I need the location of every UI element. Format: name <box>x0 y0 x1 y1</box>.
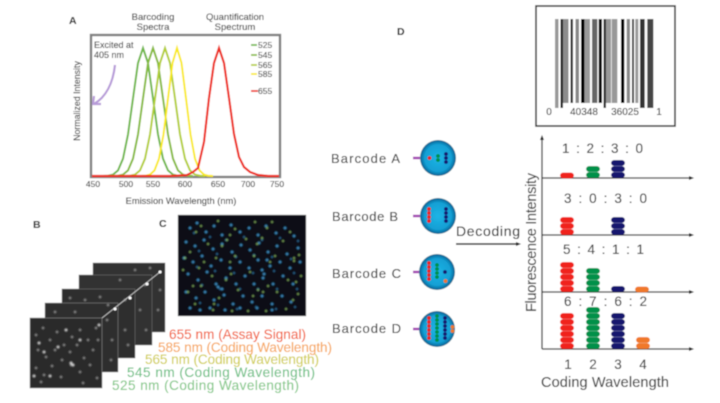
baseline arrowheads <box>689 176 694 351</box>
ratio row A: 1 : 2 : 3 : 0 <box>562 141 643 156</box>
coding wavelength numbers: 3 <box>614 357 622 372</box>
x axis ticks: 700 <box>241 179 255 189</box>
barcode digits: 40348 <box>570 107 598 118</box>
curve 585 <box>141 48 213 176</box>
barcode digits: 0 <box>546 107 552 118</box>
name: Barcode C <box>332 266 401 281</box>
name: Barcode D <box>332 321 401 336</box>
decoding label: Decoding <box>456 223 520 239</box>
label D: D <box>397 26 405 38</box>
ratio row B: 3 : 0 : 3 : 0 <box>564 191 647 206</box>
legend: 585 <box>258 69 272 79</box>
legend: 525 <box>258 40 272 50</box>
legend: 545 <box>258 50 272 60</box>
curve 565 <box>125 48 205 176</box>
ratio row D: 6 : 7 : 6 : 2 <box>564 294 647 309</box>
barcode C row <box>332 254 455 290</box>
coding wavelength numbers: 1 <box>564 357 572 372</box>
curve 525 <box>103 48 183 176</box>
label 545: 545 nm (Coding Wavelength) <box>127 365 315 380</box>
frame 565 <box>62 289 135 358</box>
linker <box>413 271 420 273</box>
heading: barcoding spectra: Barcoding <box>132 12 174 23</box>
linker <box>413 215 420 217</box>
label B: B <box>33 219 41 231</box>
icon: purple excitation arrow <box>93 65 115 104</box>
heading: quantification spectrum: Spectrum <box>215 22 255 33</box>
excitation note: 405 nm <box>94 50 124 60</box>
barcode digits: 1 <box>656 107 662 118</box>
stacks row A <box>563 163 622 176</box>
bead <box>420 140 456 176</box>
quantum dots <box>429 316 452 344</box>
panel A: emission spectra <box>69 12 284 206</box>
quantum dots <box>429 263 446 283</box>
curve 545 <box>113 48 193 176</box>
y axis title: Fluorescence Intensity <box>524 172 540 312</box>
composite background <box>178 215 306 316</box>
quantum dots <box>429 209 446 222</box>
legend: 655 <box>258 86 272 96</box>
x axis ticks: 500 <box>119 179 133 189</box>
ratio row C: 5 : 4 : 1 : 1 <box>563 242 644 257</box>
y axis title: Normalized Intensity <box>72 61 82 141</box>
frame 655 <box>93 263 165 332</box>
linker <box>413 328 420 330</box>
decoding arrow <box>456 242 521 246</box>
chart frame <box>91 35 280 177</box>
label 655: 655 nm (Assay Signal) <box>169 327 306 342</box>
barcode digits: 36025 <box>611 107 639 118</box>
heading: quantification spectrum: Quantification <box>206 12 264 23</box>
stacks row B <box>563 220 622 232</box>
label C: C <box>159 218 167 230</box>
x axis ticks: 750 <box>270 179 284 189</box>
green spots <box>183 221 301 311</box>
name: Barcode B <box>332 209 398 224</box>
bar chart: fluorescence intensity <box>524 135 694 391</box>
linker <box>413 157 420 159</box>
excitation note: Excited at <box>94 40 134 50</box>
x axis title: Emission Wavelength (nm) <box>126 196 236 206</box>
bead <box>420 198 456 234</box>
bead <box>419 254 455 290</box>
speckle dots <box>34 268 160 383</box>
label A: A <box>69 15 77 27</box>
stacks row D <box>563 310 647 346</box>
label 565: 565 nm (Coding Wavelength) <box>145 352 319 367</box>
barcode bars <box>555 19 653 108</box>
x axis ticks: 650 <box>211 179 225 189</box>
coding wavelength numbers: 4 <box>639 357 647 372</box>
wavelength labels <box>112 327 332 393</box>
label 585: 585 nm (Coding Wavelength) <box>158 340 332 355</box>
frame 525 front <box>30 318 102 388</box>
panel D: barcodes <box>331 6 694 391</box>
baselines <box>542 178 690 349</box>
barcode D row <box>332 311 455 347</box>
barcode box <box>536 6 675 126</box>
y axis <box>540 135 544 349</box>
alignment points <box>115 272 160 309</box>
x axis ticks: 450 <box>86 179 100 189</box>
stacks row C <box>563 265 646 290</box>
x axis ticks: 550 <box>146 179 160 189</box>
stack alignment line <box>102 272 160 318</box>
frame 585 <box>79 275 152 345</box>
panel C: composite image <box>159 215 306 316</box>
barcode B row <box>332 198 456 234</box>
curve 655 <box>92 48 279 176</box>
blue spots <box>184 223 300 310</box>
x axis ticks: 600 <box>178 179 192 189</box>
label 525: 525 nm (Coding Wavelength) <box>112 378 299 393</box>
bead <box>419 311 455 347</box>
name: Barcode A <box>331 151 400 166</box>
coding wavelength numbers: 2 <box>589 357 597 372</box>
heading: barcoding spectra: Spectra <box>137 22 170 33</box>
legend: 565 <box>258 60 272 70</box>
barcode A row <box>331 140 456 176</box>
frame 545 <box>45 303 118 372</box>
quantum dots <box>430 154 446 164</box>
panel B: image stack <box>30 219 165 388</box>
x axis title: Coding Wavelength <box>541 375 669 391</box>
legend <box>251 40 272 96</box>
